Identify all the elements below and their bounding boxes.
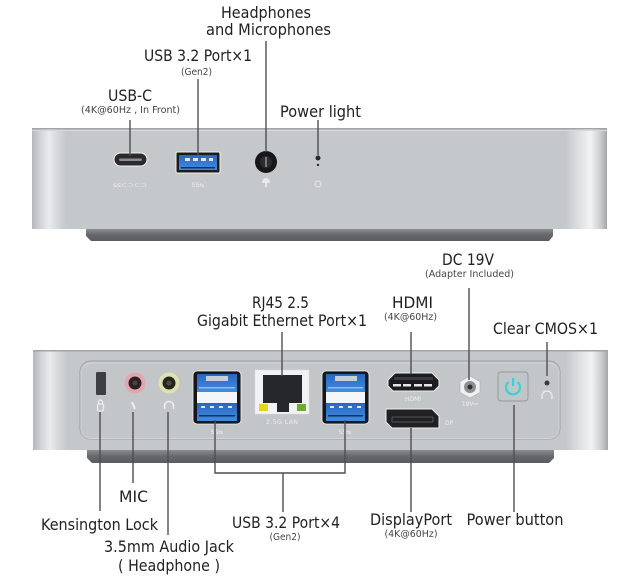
label: Power button: Power button [466,510,564,529]
label: Clear CMOS: Clear CMOS×1 [493,319,598,338]
port: HDMI [388,373,439,403]
label: Headphones and Microphones: and Microphones [206,20,331,39]
label: HDMI [384,293,437,323]
clear CMOS hole [542,380,552,399]
port: USB-C [113,153,147,189]
label: USB 3.2 Port x4: (Gen2) [270,532,300,543]
label: USB-C [81,86,180,116]
label: Headphones and Microphones: Headphones [221,3,311,22]
label: RJ45 Ethernet: Gigabit Ethernet Port×1 [197,311,367,330]
front base [86,229,553,241]
front body [32,128,607,229]
label: HDMI: (4K@60Hz) [384,312,437,323]
port: USB 3.2: SS⇆ [192,182,204,189]
label: RJ45 Ethernet: RJ45 2.5 [252,293,309,312]
port: USB 3.2 [176,152,220,189]
port: DisplayPort: DP [445,420,454,427]
port: USB 3.2 dual left: SS⇆ [211,429,223,436]
port: MIC [124,372,146,409]
port: HDMI: HDMI [405,396,421,403]
label: USB-C: USB-C [108,86,152,105]
label: USB 3.2 Port x1: USB 3.2 Port×1 [144,46,252,65]
port: RJ45 LAN: 2.5G LAN [266,419,298,426]
port: headphone jack [255,151,277,187]
label: HDMI: HDMI [392,293,433,312]
label: DisplayPort [370,510,452,540]
label: DisplayPort: (4K@60Hz) [384,529,438,540]
port: headphone [158,372,180,409]
port: DisplayPort [386,409,454,428]
label: DC 19V: (Adapter Included) [425,269,514,280]
label: USB-C: (4K@60Hz , In Front) [81,105,180,116]
port: USB-C: ss⊂⊃⊂⊃ [113,182,147,189]
port: USB 3.2 dual right: SS⇆ [339,429,351,436]
label: RJ45 Ethernet [197,293,367,330]
label: DC 19V: DC 19V [442,250,494,269]
label: 3.5mm Audio Jack: ( Headphone ) [118,556,220,575]
label: DC 19V [425,250,514,280]
label: MIC: MIC [119,487,148,506]
label: USB 3.2 Port x4 [232,513,340,543]
power button [498,372,528,401]
label: USB 3.2 Port x4: USB 3.2 Port×4 [232,513,340,532]
label: USB 3.2 Port x1 [144,46,252,78]
label: 3.5mm Audio Jack: 3.5mm Audio Jack [104,537,235,556]
rear body [33,350,608,450]
device: rear view [33,350,608,463]
port: DC 19V [460,376,480,408]
port: RJ45 LAN [255,370,309,426]
port: USB 3.2 dual left [193,371,241,436]
label: Headphones and Microphones [206,3,331,39]
label: 3.5mm Audio Jack [104,537,235,575]
device: front view [32,128,607,241]
label: Power light: Power light [280,102,361,121]
rear base [87,450,554,463]
label: DisplayPort: DisplayPort [370,510,452,529]
leader lines [100,41,547,535]
port: USB 3.2 dual right [322,371,369,436]
label: Kensington Lock: Kensington Lock [41,515,159,534]
power light [315,156,321,187]
port: DC 19V: 19V⎓ [462,401,478,408]
port: Kensington slot [96,372,106,411]
label: USB 3.2 Port x1: (Gen2) [181,67,212,78]
